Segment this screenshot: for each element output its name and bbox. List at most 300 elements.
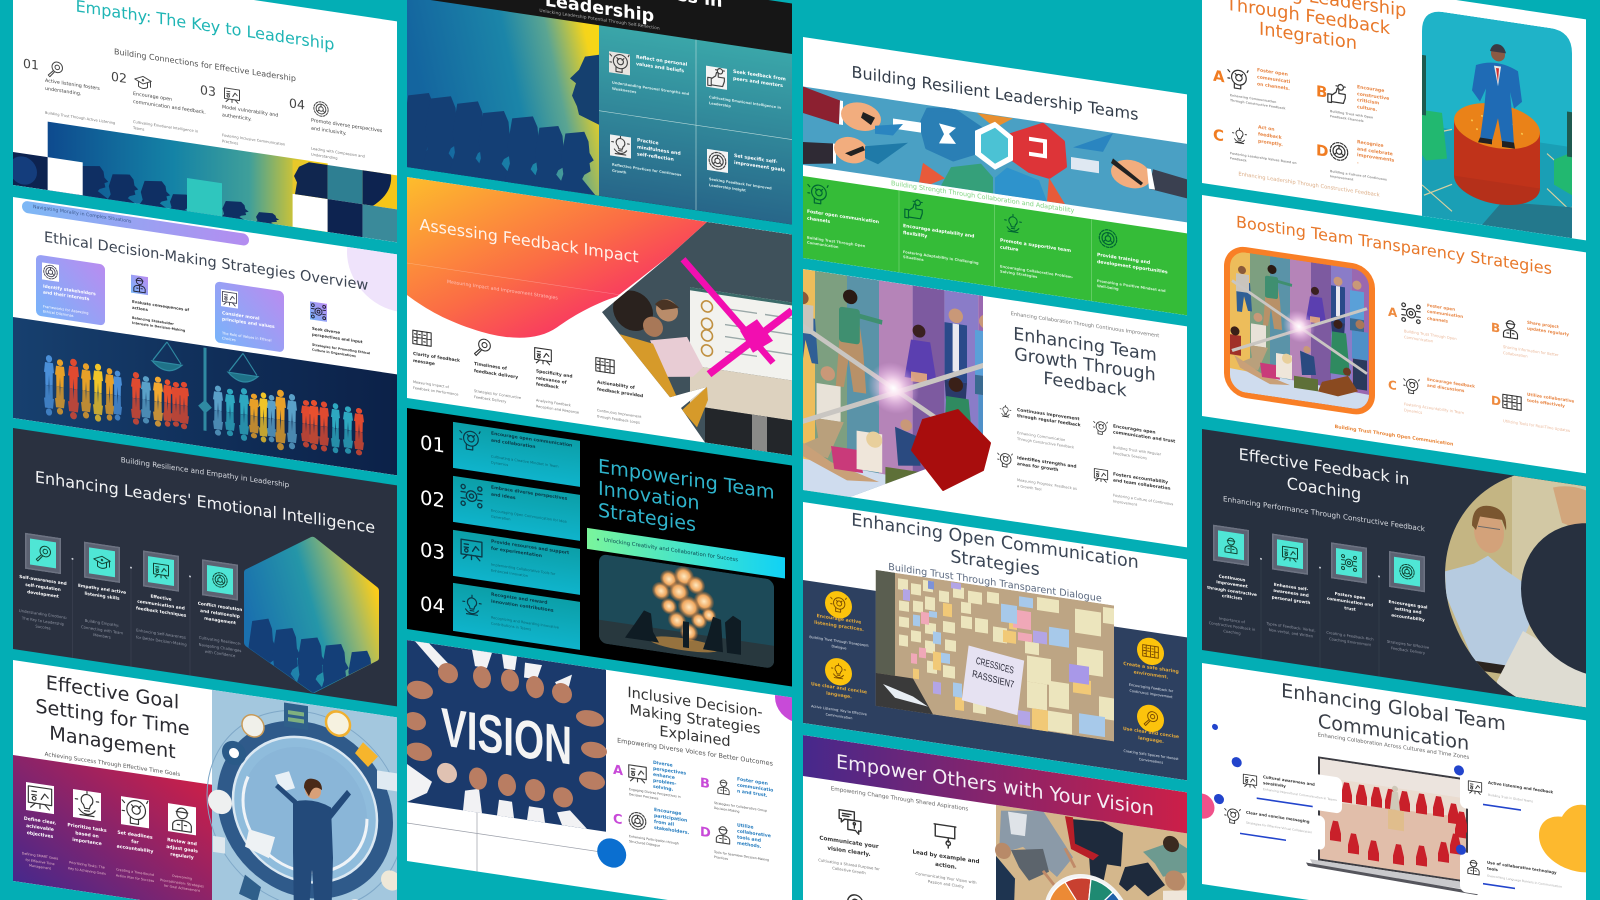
title xyxy=(598,456,775,547)
card: clear messaging: Strategies for Effective Virtual Collaboration xyxy=(1246,821,1312,834)
art: laptop with red pieces and decorative blobs xyxy=(1202,663,1586,900)
option B: Collaboration xyxy=(1503,351,1528,359)
step 2: importance xyxy=(72,838,102,847)
title xyxy=(1202,666,1585,773)
title: Management xyxy=(49,721,176,763)
card 02 xyxy=(453,476,580,541)
step 1: Understanding Emotions: xyxy=(19,608,67,620)
option A: problem- xyxy=(653,779,676,788)
option C: promptly. xyxy=(1258,139,1283,148)
art: navy band and sticky-note wall photo: RASSSIEN7 xyxy=(972,669,1015,691)
icon: bulb xyxy=(999,403,1012,420)
step 2 xyxy=(67,789,107,875)
item 4: perspectives and input xyxy=(312,331,362,344)
item 03: Fostering Inclusive Communication xyxy=(222,133,285,147)
card 02: Encouraging Open Communication for Idea xyxy=(491,509,567,524)
title: Coaching xyxy=(1287,473,1361,503)
step 2: Prioritize tasks xyxy=(67,823,107,834)
subtitle: Building Resilience and Empathy in Leadership xyxy=(121,455,289,489)
card 01 xyxy=(453,422,580,487)
icon frame: board xyxy=(1272,533,1308,574)
cell 4: Set specific self- xyxy=(734,153,778,165)
step 1: Define clear, xyxy=(24,817,56,826)
option B: B xyxy=(700,776,710,792)
icon: board xyxy=(460,538,483,562)
title: Ethical Decision-Making Strategies Overview xyxy=(44,230,368,294)
step 2: Prioritizing Tasks: The xyxy=(69,860,105,870)
icon: monitor xyxy=(534,347,552,366)
item 04 xyxy=(289,95,382,160)
title: Innovation xyxy=(598,476,700,515)
right item 1 xyxy=(1116,633,1186,705)
item 01: 01 xyxy=(23,55,39,73)
icon: bulb xyxy=(1231,124,1248,149)
option C xyxy=(613,802,693,856)
left item 2: Communication xyxy=(826,712,852,720)
item 2: Evaluate consequences of xyxy=(132,299,189,312)
card: collaborative technology: Use of collaborative technology xyxy=(1487,860,1557,875)
item 03 xyxy=(200,82,285,147)
item 3: relevance of xyxy=(536,376,567,385)
step 4: accountability xyxy=(1391,612,1425,622)
option D: Tools for Seamless Decision-Making xyxy=(714,850,769,862)
card: cultural awareness xyxy=(1242,771,1342,810)
icon: gear xyxy=(42,262,59,281)
step 4: Strategies for Effective xyxy=(1387,639,1429,649)
icon frame: gear xyxy=(202,559,238,601)
card 1 xyxy=(36,254,105,325)
card 03: Implementing Collaborative Tools for xyxy=(491,563,555,576)
option C: Dynamics xyxy=(1404,408,1422,415)
option A: communication xyxy=(1427,309,1463,319)
icon: gold circle xyxy=(825,589,852,620)
panel: Global team communication slide xyxy=(1202,663,1586,900)
right item 2: Creating Safe Spaces for Honest xyxy=(1124,749,1178,761)
cell 1: Reflect on personal xyxy=(636,55,687,67)
icon: gold circle xyxy=(1137,636,1164,667)
panel: Ethical decision-making slide xyxy=(13,197,397,475)
item 1 xyxy=(412,330,460,397)
item 4: Fostering a Culture of Continuous xyxy=(1113,493,1173,506)
item 3: Analyzing Feedback xyxy=(536,398,571,407)
option D xyxy=(1316,134,1411,190)
option D: Practices xyxy=(714,855,728,861)
option A: channels xyxy=(1427,315,1448,323)
cell 1: values and beliefs xyxy=(636,62,684,74)
panel: Team innovation slide xyxy=(407,408,792,687)
step 4: Overcoming xyxy=(172,874,192,881)
left item 1: listening practices. xyxy=(814,620,864,633)
panel: Goal setting slide xyxy=(13,660,397,900)
panel: Feedback integration slide xyxy=(1202,0,1586,240)
item 01: Building Trust Through Active Listening xyxy=(45,111,115,125)
option D: methods. xyxy=(737,842,761,850)
subtitle: Achieving Success Through Effective Time Goals xyxy=(45,752,180,778)
card: collaborative technology: tools xyxy=(1487,865,1498,872)
icon: screen with microphone xyxy=(932,820,958,850)
icon: person at desk xyxy=(131,275,148,295)
hexagon image xyxy=(72,536,379,693)
icon: gear head xyxy=(1227,67,1249,92)
title: Making Strategies xyxy=(630,702,760,738)
step 1: Management xyxy=(29,863,51,871)
option A: Foster open xyxy=(1427,303,1455,312)
item 01: Active listening fosters xyxy=(45,79,100,92)
step 2: based on xyxy=(75,831,99,840)
option C: and discussions xyxy=(1427,383,1464,394)
item 1: Continuous improvement xyxy=(1017,408,1080,422)
right item 1: Continuous Improvement xyxy=(1129,688,1173,699)
photo: VISION fists: VISION xyxy=(441,696,572,777)
item 2: Feedback Delivery xyxy=(474,395,506,404)
card 02: and ideas xyxy=(491,492,516,501)
title xyxy=(983,320,1187,410)
icon: grid xyxy=(1501,391,1523,414)
icon: bulb xyxy=(461,592,483,620)
step 4 xyxy=(1383,550,1433,667)
image band: crowd and scales xyxy=(13,246,397,476)
photo: people in orange rounded frame xyxy=(1224,246,1375,414)
item 1: Clarity of feedback xyxy=(413,352,460,364)
step 1: Coaching xyxy=(1223,629,1241,635)
step 4: with Confidence xyxy=(205,649,235,658)
item 3 xyxy=(997,451,1085,500)
option D: improvements xyxy=(1357,153,1394,164)
subtitle: Unlocking Leadership Potential Through Self-Reflection xyxy=(539,8,660,31)
icon: group xyxy=(1465,857,1482,877)
item 2: Passion and Clarity xyxy=(928,878,964,889)
left item 2 xyxy=(804,653,874,728)
item 2: Interests in Decision-Making xyxy=(132,321,185,333)
cell 3 xyxy=(610,134,682,177)
subtitle: Building Connections for Effective Leadership xyxy=(114,47,296,83)
art: wave, photo, pink cross xyxy=(407,177,792,456)
card 04: Recognize and reward xyxy=(491,593,547,606)
title: Explained xyxy=(659,724,731,750)
title xyxy=(803,503,1187,603)
item 03: Practices xyxy=(222,139,238,146)
column 4: Provide training and xyxy=(1097,253,1150,266)
item 2 xyxy=(899,815,995,900)
option C: Act on xyxy=(1258,125,1274,133)
item 3: Specificity and xyxy=(536,369,572,380)
card 01: Dynamics xyxy=(491,460,508,467)
item 2: Timeliness of xyxy=(474,362,507,372)
step 2: Enhances self- xyxy=(1274,581,1308,591)
step 3: communication and xyxy=(1327,596,1373,607)
title: Boosting Team Transparency Strategies xyxy=(1236,212,1552,278)
right item 2: Conversations xyxy=(1139,757,1163,764)
subtitle: Building Strength Through Collaboration and Adaptability xyxy=(891,179,1074,215)
step 1: criticism xyxy=(1222,593,1242,601)
icon: magnifier xyxy=(48,62,63,78)
subtitle: Enhancing Performance Through Constructive Feedback xyxy=(1223,494,1425,533)
right item 1: Encouraging Feedback for xyxy=(1129,683,1173,693)
icon: board xyxy=(1467,779,1483,797)
icon: gear xyxy=(1328,139,1350,164)
panel: Empower others slide xyxy=(803,735,1187,900)
item 4: Fosters accountability xyxy=(1113,472,1168,486)
left item 2: language. xyxy=(826,691,852,700)
icon: chess knight xyxy=(459,430,481,451)
option D: Recognize xyxy=(1357,140,1383,149)
step 1: Self-awareness and xyxy=(19,575,67,587)
icon: board xyxy=(221,289,238,308)
option B: Feedback Channels xyxy=(1330,114,1364,123)
title: Enhancing Global Team xyxy=(1281,679,1506,735)
man xyxy=(275,773,351,900)
option A: A xyxy=(1388,305,1397,320)
card 04: Recognizing and Rewarding Innovative xyxy=(491,616,559,630)
item 2: Lead by example and xyxy=(912,849,980,865)
step 4 xyxy=(160,803,204,893)
title: Integration xyxy=(1259,18,1357,54)
option A: communicati xyxy=(1257,75,1290,85)
option B: B xyxy=(1316,82,1327,102)
pill subtitle xyxy=(22,200,249,246)
option D: Building a Culture of Continuous xyxy=(1330,169,1387,182)
icon: team xyxy=(310,301,327,322)
card 1: Identify stakeholders xyxy=(43,284,96,297)
cell 3: self-reflection xyxy=(637,152,674,162)
icon frame: team xyxy=(1331,542,1367,583)
icon: team gear xyxy=(1400,301,1422,326)
item 2: Communicating Your Vision with xyxy=(915,871,977,885)
option C: Structured Dialogue xyxy=(629,839,660,848)
icon: gear xyxy=(627,809,648,833)
title: Assessing Feedback Impact xyxy=(420,215,639,267)
column 4: Well-being xyxy=(1097,284,1119,292)
option D xyxy=(700,815,780,869)
icon frame: person xyxy=(1213,524,1249,566)
title xyxy=(606,682,784,759)
step 1 xyxy=(1207,523,1257,641)
item 03: 03 xyxy=(200,82,216,99)
step 4: and relationship xyxy=(200,609,240,620)
step 3: accountability xyxy=(117,844,153,855)
title: Enhancing Open Communication xyxy=(851,510,1139,573)
option B: B xyxy=(1491,320,1500,336)
option B: constructive xyxy=(1357,92,1389,102)
option A: solving. xyxy=(653,785,673,793)
panel: Assessing feedback slide xyxy=(407,177,792,456)
icon: briefcase xyxy=(595,357,615,374)
step 3: for Better Decision-Making xyxy=(136,634,187,647)
option C: stakeholders. xyxy=(654,826,689,836)
item 02 xyxy=(111,69,206,134)
step 3: Set deadlines xyxy=(117,831,153,841)
panel: Inclusive decision-making slide xyxy=(407,640,792,900)
title: Strategies xyxy=(598,498,696,536)
option C: C xyxy=(613,812,623,828)
panel: Emotional intelligence slide xyxy=(13,428,397,706)
step 3: Creating a Time-Bound xyxy=(116,867,154,877)
step 2: Types of Feedback: Verbal, xyxy=(1266,621,1316,632)
item 1: vision clearly. xyxy=(827,846,871,858)
step 1 xyxy=(22,782,58,871)
icon: bank xyxy=(412,330,432,347)
icon: person xyxy=(715,774,732,800)
cell 2: Seek feedback from xyxy=(733,69,786,82)
item 2: feedback delivery xyxy=(474,369,518,381)
card 3: principles and values xyxy=(222,317,275,330)
cell 4: Leadership Insight xyxy=(709,182,746,192)
step 1: Importance of xyxy=(1219,616,1245,624)
icon: gear xyxy=(707,148,728,172)
title xyxy=(1202,438,1446,517)
option B: updates regularly xyxy=(1527,326,1569,337)
column 1: Communication xyxy=(807,241,838,250)
caption: Building Trust Through Open Communication xyxy=(1335,425,1453,448)
item 4: feedback provided xyxy=(597,387,643,399)
item 1: Cultivating a Shared Purpose for xyxy=(818,857,880,871)
option A: enhance xyxy=(653,773,675,781)
option A: Enhancing Communication xyxy=(1230,93,1276,104)
step 4: Review and xyxy=(167,838,197,847)
column 1: Building Trust Through Open xyxy=(807,236,865,248)
icon: bulb xyxy=(610,134,631,158)
card 04 xyxy=(453,583,580,650)
icon: gear xyxy=(1097,226,1119,251)
option C: Encourage feedback xyxy=(1427,377,1475,389)
step 1: through constructive xyxy=(1207,584,1257,597)
column 4: Promoting a Positive Mindset and xyxy=(1097,279,1166,293)
step 4 xyxy=(198,559,242,658)
icon frame: board xyxy=(143,550,179,592)
option D: tools and xyxy=(737,836,761,844)
card 3: The Role of Values in Ethical xyxy=(222,331,271,342)
subtitle: Empowering Diverse Voices for Better Outcomes xyxy=(617,736,773,768)
item 3: Identifies strengths and xyxy=(1017,456,1077,470)
column 2: Fostering Adaptability in Challenging xyxy=(903,250,979,265)
card 01: Encourage open communication xyxy=(491,432,572,449)
icon: group xyxy=(1500,317,1521,342)
step 3: Coaching Environment xyxy=(1329,636,1371,647)
step 3 xyxy=(136,550,187,647)
option D: Utilize collaborative xyxy=(1527,392,1574,404)
icon: person with tools xyxy=(713,822,733,848)
step 4: Navigating Challenges xyxy=(199,641,241,653)
icon: gear head xyxy=(807,182,829,207)
option D: and celebrate xyxy=(1357,147,1393,157)
column 4 xyxy=(1096,225,1186,310)
left item 1: Encourage active xyxy=(817,614,861,626)
panel: Empathy slide xyxy=(13,0,397,242)
cell 2: Leadership xyxy=(709,100,731,107)
cell 2 xyxy=(706,66,786,109)
option B xyxy=(1316,77,1411,133)
art: silhouette image and right teal panel xyxy=(407,0,792,224)
column 3: culture xyxy=(1000,245,1018,253)
card 1: and their interests xyxy=(43,290,89,302)
option A xyxy=(1388,299,1478,362)
option B: Foster open xyxy=(737,777,768,787)
option D xyxy=(1491,386,1581,450)
icon: brain xyxy=(609,51,630,75)
column 3 xyxy=(999,210,1091,296)
option A: Through Constructive Feedback xyxy=(1230,98,1285,110)
item 2: Building Trust with Regular xyxy=(1113,445,1161,457)
card 04: innovation contributions xyxy=(491,599,554,613)
subtitle: Enhancing Collaboration Through Continuous Improvement xyxy=(1011,311,1159,339)
step 2 xyxy=(78,542,126,640)
option B: Strategies for Collaborative Group xyxy=(714,801,767,813)
card: cultural awareness: Cultural awareness and xyxy=(1263,774,1315,787)
card 3 xyxy=(215,281,284,352)
option B: communicatio xyxy=(737,783,773,794)
item 4: Strategies for Promoting Ethical xyxy=(312,343,370,355)
step 4: Procrastination: Strategies xyxy=(160,877,204,888)
item 03: Model vulnerability and xyxy=(222,105,278,119)
step 2: Members xyxy=(93,632,111,640)
option C: C xyxy=(1388,378,1397,393)
card 01: Cultivating a Creative Mindset in Team xyxy=(491,455,559,469)
column 2: flexibility xyxy=(903,231,927,239)
option D: Improvement xyxy=(1330,174,1353,182)
option C: Fostering Leadership Values Based on xyxy=(1230,151,1297,165)
right item 1: environment. xyxy=(1134,670,1168,680)
item 1: Collective Growth xyxy=(832,865,866,875)
title xyxy=(1202,0,1414,63)
column 1: Foster open communication xyxy=(807,210,879,225)
item 04: Promote diverse perspectives xyxy=(311,119,382,134)
option C: C xyxy=(1213,126,1224,145)
option D: tools effectively xyxy=(1527,398,1565,409)
option B xyxy=(1491,314,1581,378)
item 1 xyxy=(999,403,1087,452)
column 3: Solving Strategies xyxy=(1000,270,1037,279)
step 1 xyxy=(19,532,67,631)
option C: Enhancing Participation through xyxy=(629,834,679,846)
step 3 xyxy=(1325,541,1375,658)
option B: culture. xyxy=(1357,105,1377,113)
icon: gear head xyxy=(1224,806,1241,826)
item 2: Encourages open xyxy=(1113,424,1156,436)
step 2: Empathy and active xyxy=(78,584,126,596)
option C: feedback xyxy=(1258,132,1282,141)
card 3: Choices xyxy=(222,336,236,342)
icon: gear head xyxy=(997,451,1013,469)
item 2: Strategies for Constructive xyxy=(474,389,521,400)
option B: n and trust. xyxy=(737,790,768,799)
step 3 xyxy=(116,796,154,883)
cell 2: peers and mentors xyxy=(733,76,783,89)
option C: from all xyxy=(654,820,674,828)
option C xyxy=(1213,119,1308,175)
icon: board xyxy=(627,762,648,786)
caption: Enhancing Leadership Through Constructive Feedback xyxy=(1238,171,1380,199)
step 4: management xyxy=(204,617,236,626)
title: Effective Feedback in xyxy=(1239,444,1409,488)
item 3: a Growth Tool xyxy=(1017,484,1041,491)
item 03: authenticity. xyxy=(222,113,252,123)
item 1: message xyxy=(413,359,435,367)
option A: A xyxy=(613,763,623,779)
icon: team gear xyxy=(460,484,483,508)
option A xyxy=(1213,62,1308,118)
card 1: Frameworks for Assessing xyxy=(43,304,88,315)
step 4: adjust goals xyxy=(166,845,198,855)
step 2: Non-verbal, and Written xyxy=(1269,628,1313,638)
item 1 xyxy=(803,801,899,885)
card: clear messaging xyxy=(1224,806,1324,845)
step 4: for Goal Achievement xyxy=(164,884,200,893)
step 4: Feedback Delivery xyxy=(1391,646,1425,655)
item 01 xyxy=(23,55,115,125)
item 01: understanding. xyxy=(45,87,81,97)
card 01: and collaboration xyxy=(491,438,535,450)
icon: third item xyxy=(839,890,865,900)
